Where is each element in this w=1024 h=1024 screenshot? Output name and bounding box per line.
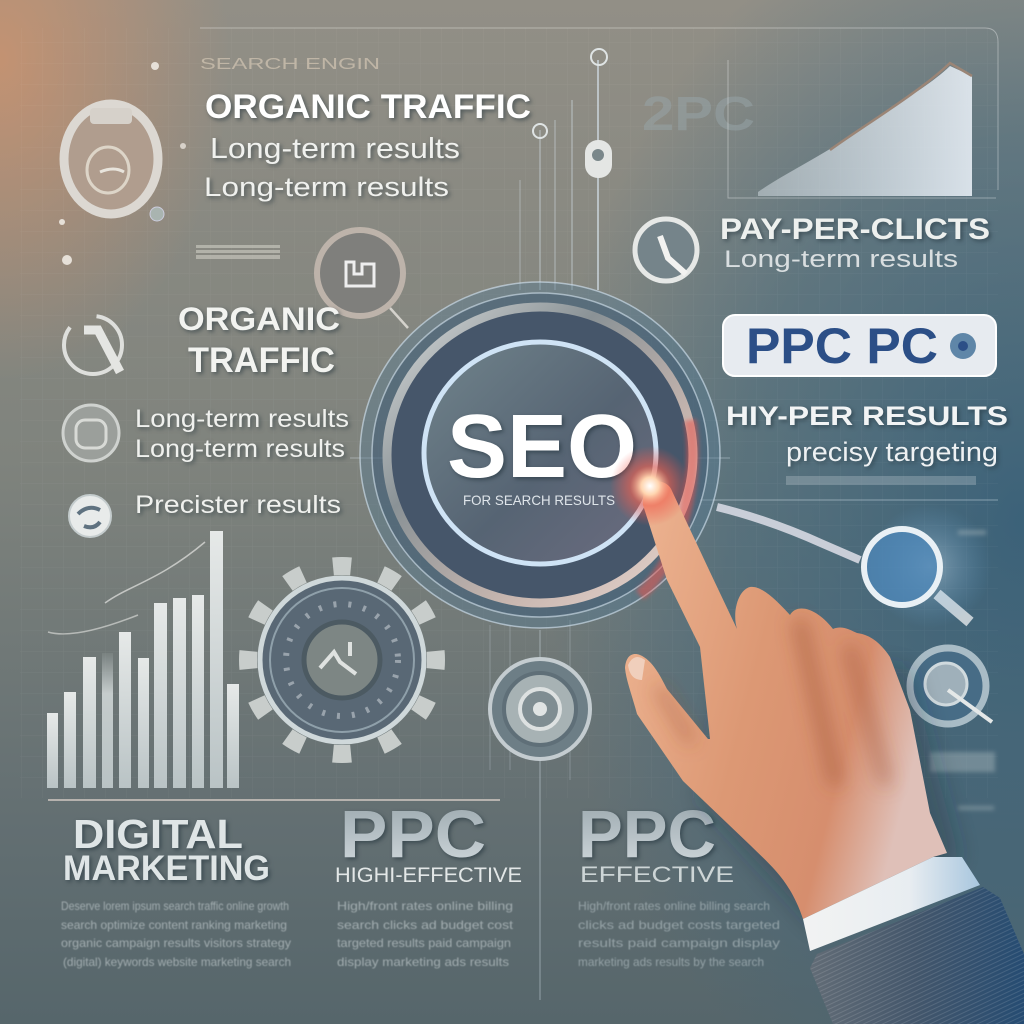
body text: High/front rates online billing — [337, 899, 513, 913]
icon: magnifier small top center — [317, 230, 408, 328]
watermark: 2PC: 2PC — [642, 88, 755, 141]
icon: white disc — [69, 495, 111, 537]
icon: magnifying glass — [717, 504, 992, 628]
spark at fingertip — [610, 446, 690, 526]
text: precister results: Precister results — [135, 491, 341, 519]
small heading: search engine: SEARCH ENGIN — [200, 56, 380, 73]
heading: PPC — [340, 797, 486, 872]
sleeve — [810, 887, 1024, 1024]
subheading: EFFECTIVE — [580, 862, 734, 887]
body text — [578, 899, 780, 969]
text: long-term results: Long-term results — [135, 435, 345, 463]
label: SEO: SEO — [447, 397, 637, 497]
heading: PPC — [578, 797, 716, 872]
heading: organic traffic two lines: TRAFFIC — [188, 341, 335, 380]
heading: pay-per-clicks: PAY-PER-CLICTS — [720, 213, 990, 246]
label: subcaption: FOR SEARCH RESULTS — [463, 492, 615, 508]
body text: results paid campaign display — [578, 936, 780, 950]
icon: top left ring — [64, 104, 164, 221]
text: long-term results one: Long-term results — [210, 133, 460, 165]
heading: organic traffic two lines: ORGANIC — [178, 301, 340, 337]
decorative strip label — [196, 245, 280, 259]
body text: search clicks ad budget cost — [337, 918, 514, 932]
panel: top left organic traffic — [64, 56, 531, 221]
icon: gear — [248, 566, 436, 754]
text: long-term results: Long-term results — [724, 246, 958, 273]
text: precisy targeting: precisy targeting — [786, 437, 998, 467]
icon: small pill top — [533, 49, 612, 178]
icon: check circle right — [910, 648, 992, 724]
bottom column: PPC high-effective — [335, 797, 522, 969]
body text: High/front rates online billing search — [578, 899, 770, 913]
center rings decoration — [350, 60, 998, 1000]
body text: organic campaign results visitors strategy — [61, 936, 291, 950]
icon: round lens bottom center — [490, 659, 590, 759]
heading: organic traffic: ORGANIC TRAFFIC — [205, 88, 531, 126]
bottom column: digital marketing — [48, 800, 500, 969]
heading: DIGITAL — [73, 811, 243, 857]
body text: display marketing ads results — [337, 955, 509, 969]
hand shadow — [700, 650, 960, 930]
body text: Deserve lorem ipsum search traffic online growth — [61, 899, 289, 913]
body text: marketing ads results by the search — [578, 955, 764, 969]
body text — [337, 899, 514, 969]
panel: PPC right — [723, 315, 1008, 485]
subheading: HIGHI-EFFECTIVE — [335, 864, 522, 887]
panel: PPC chart top right — [635, 60, 996, 281]
heading: organic traffic two lines — [178, 301, 340, 380]
text: long-term results: Long-term results — [135, 405, 349, 433]
faint text line — [786, 476, 976, 485]
faint blocks right — [930, 530, 995, 810]
body text: targeted results paid campaign — [337, 936, 511, 950]
icon: arrow ring — [64, 316, 122, 374]
icon: pin circle — [635, 219, 697, 281]
bottom column: PPC effective — [578, 797, 780, 969]
heading: hiy-per results: HIY-PER RESULTS — [726, 401, 1008, 431]
body text — [61, 899, 291, 969]
SEO button — [360, 282, 720, 628]
area chart — [728, 60, 996, 198]
text: long-term results — [135, 405, 349, 463]
body text: search optimize content ranking marketing — [61, 918, 287, 932]
bar chart — [47, 531, 239, 788]
panel: left list — [63, 301, 349, 537]
body text: (digital) keywords website marketing search — [63, 955, 291, 969]
hand pointing — [625, 481, 947, 919]
cuff — [803, 857, 980, 951]
pill: PPC PC — [723, 315, 996, 376]
heading — [63, 811, 270, 888]
text: long-term results two: Long-term results — [204, 172, 449, 202]
heading: MARKETING — [63, 849, 270, 888]
pill: PPC PC: PPC PC — [746, 318, 938, 374]
icon: glass circle — [63, 405, 119, 461]
body text: clicks ad budget costs targeted — [578, 918, 780, 932]
